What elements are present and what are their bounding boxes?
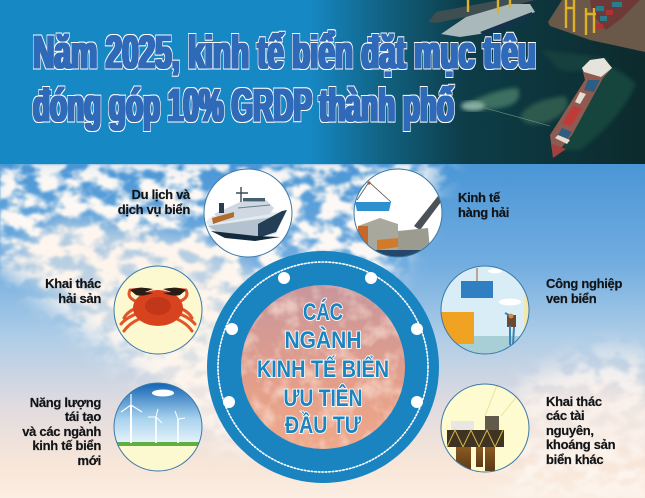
icon: wind turbines [114,383,202,471]
red cargo ship [550,58,612,158]
center heading [257,298,389,439]
icon: cruise ship [204,169,292,257]
title [33,26,536,131]
label: khai thác hải sản: hải sản [58,291,101,306]
label: khai thác tài nguyên: khoáng sản [546,437,616,452]
label: kinh tế hàng hải: Kinh tế [458,190,501,205]
label: năng lượng tái tạo: Năng lượng [30,395,101,410]
icon: cargo containers [354,169,442,258]
label: kinh tế hàng hải: hàng hải [458,205,509,220]
label: năng lượng tái tạo: mới [77,453,101,468]
label: năng lượng tái tạo: và các ngành [22,424,101,439]
label: khai thác tài nguyên: nguyên, [546,423,594,438]
icon: offshore platform [441,384,529,472]
label: năng lượng tái tạo: kinh tế biển [32,438,101,453]
label: khai thác tài nguyên: biển khác [546,452,603,467]
label: năng lượng tái tạo: tái tạo [65,409,101,424]
label: khai thác tài nguyên: các tài [546,408,584,423]
header band [0,0,645,164]
label: du lịch và dịch vụ biển: Du lịch và [132,187,191,202]
label: khai thác tài nguyên: Khai thác [546,394,602,409]
center heading: NGÀNH [284,326,362,354]
center heading: ƯU TIÊN [284,384,362,412]
background: sky with clouds [0,164,645,498]
icon: coastal industry worker [441,266,530,356]
label: khai thác hải sản: Khai thác [45,276,101,291]
center heading: CÁC [303,298,343,326]
label: công nghiệp ven biển: ven biển [546,291,597,306]
photo: port and ships [428,0,645,158]
center heading: ĐẦU TƯ [285,411,361,439]
icon: crab [114,266,202,354]
center heading: KINH TẾ BIỂN [257,355,389,383]
central circle [207,251,439,483]
label: công nghiệp ven biển: Công nghiệp [546,276,622,291]
label: du lịch và dịch vụ biển: dịch vụ biển [118,202,190,217]
